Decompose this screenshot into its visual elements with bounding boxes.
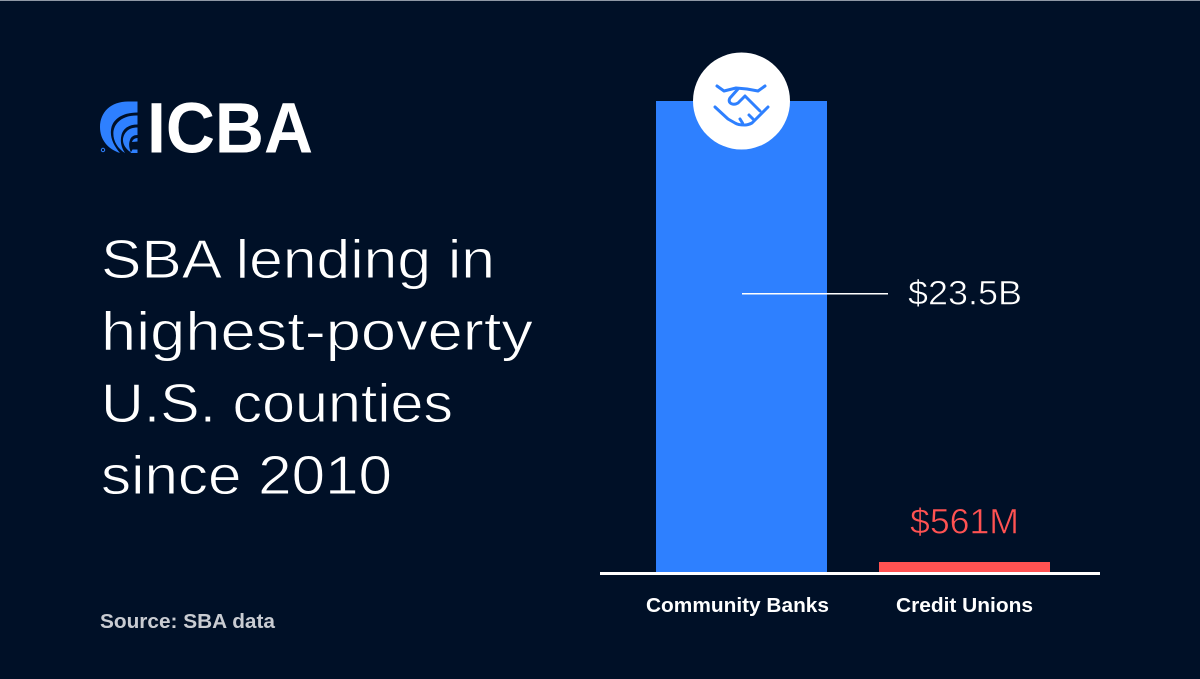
label: Community Banks: Community Banks <box>646 595 829 617</box>
icon: handshake badge <box>693 52 790 150</box>
bar chart <box>600 101 1100 617</box>
title <box>101 228 534 506</box>
bar: Credit Unions <box>879 562 1050 572</box>
title: since 2010 <box>101 444 392 506</box>
label: Credit Unions: Credit Unions <box>896 595 1033 617</box>
logo wordmark: ICBA <box>147 90 313 168</box>
value: Credit Unions: $561M <box>910 502 1019 542</box>
chart baseline <box>600 572 1100 575</box>
title: U.S. counties <box>101 372 453 434</box>
bar: Community Banks <box>656 101 827 572</box>
logo: ICBA <box>100 90 313 168</box>
icon: ICBA wave mark <box>100 102 138 153</box>
leader line <box>742 293 888 294</box>
title: SBA lending in <box>101 228 495 290</box>
title: highest-poverty <box>101 300 534 362</box>
source note: Source: SBA data <box>100 611 276 633</box>
value: Community Banks: $23.5B <box>908 274 1022 312</box>
